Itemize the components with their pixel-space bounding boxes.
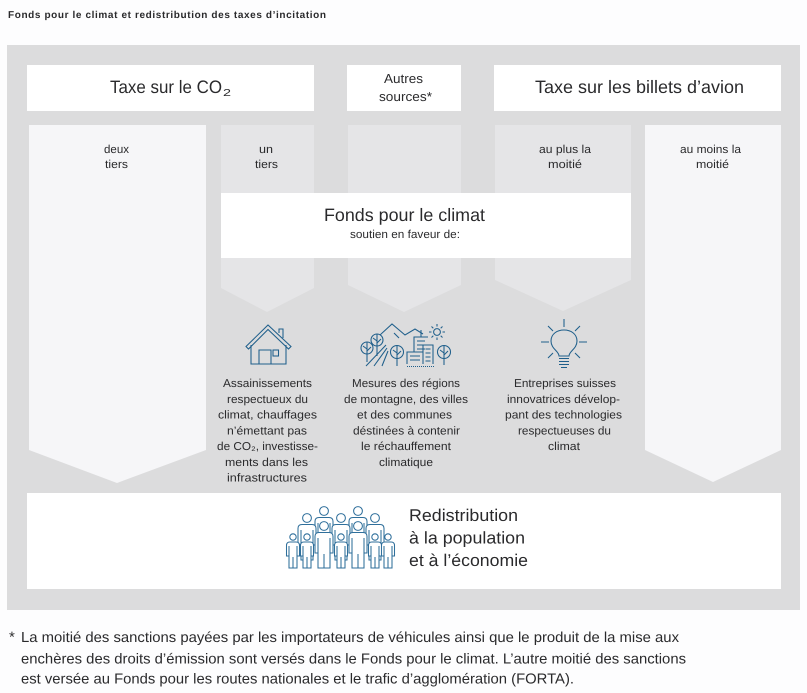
icon: group of people — [286, 507, 394, 568]
box: Autres sources: sources* — [379, 89, 432, 104]
box: Autres sources — [347, 65, 461, 111]
text: mesures des régions: climatique — [379, 457, 433, 469]
arrow: au moins la moitié: moitié — [696, 159, 729, 171]
box: Fonds pour le climat: Fonds pour le climat — [324, 205, 485, 225]
text: assainissements: de CO₂, investisse- — [217, 441, 318, 453]
arrow: deux tiers — [29, 125, 206, 483]
box: Taxe sur le CO2 — [27, 65, 314, 111]
arrow: au plus la moitié: moitié — [548, 159, 582, 171]
text: assainissements: infrastructures — [227, 472, 307, 484]
text: redistribution label: à la population — [409, 528, 525, 548]
icon: house — [246, 325, 291, 364]
text: mesures des régions — [344, 378, 468, 469]
box: Fonds pour le climat: soutien en faveur de: — [350, 229, 460, 241]
text: entreprises suisses: respectueuses du — [518, 426, 611, 438]
text: redistribution label — [409, 506, 528, 570]
icon: mountains, city and trees — [361, 324, 450, 366]
text: mesures des régions: de montagne, des villes — [344, 394, 468, 406]
footnote: est versée au Fonds pour les routes nationales et le trafic d’agglomération (FORTA). — [21, 672, 574, 688]
text: assainissements: respectueux du — [227, 394, 308, 406]
box: Taxe sur les billets d'avion: Taxe sur les billets d’avion — [535, 77, 744, 97]
footnote — [9, 629, 686, 688]
arrow: un tiers: un — [259, 144, 273, 156]
box: redistribution — [27, 493, 781, 589]
arrow: au moins la moitié — [645, 125, 781, 482]
box: Taxe sur le CO2: Taxe sur le CO — [110, 77, 222, 97]
arrow: un tiers: tiers — [255, 159, 278, 171]
text: entreprises suisses: Entreprises suisses — [514, 378, 616, 390]
text: assainissements: climat, chauffages — [218, 410, 317, 422]
text: mesures des régions: et des communes — [357, 410, 452, 422]
text: entreprises suisses: innovatrices dévelop- — [507, 394, 620, 406]
box: Taxe sur les billets d'avion — [494, 65, 781, 111]
arrow: deux tiers: tiers — [105, 159, 128, 171]
text: redistribution label: Redistribution — [409, 506, 518, 525]
title: Fonds pour le climat et redistribution des taxes d’incitation — [8, 10, 326, 21]
text: entreprises suisses: pant des technologies — [505, 410, 622, 422]
text: assainissements: ments dans les — [225, 457, 308, 469]
arrow: au moins la moitié: au moins la — [680, 144, 742, 156]
arrow: deux tiers: deux — [104, 144, 129, 156]
text: assainissements: n’émettant pas — [227, 426, 307, 438]
box: Autres sources: Autres — [384, 71, 424, 86]
footnote: La moitié des sanctions payées par les importateurs de véhicules ainsi que le produit de la mise aux — [21, 630, 680, 646]
text: assainissements: Assainissements — [223, 378, 312, 390]
text: entreprises suisses — [505, 378, 622, 453]
footnote: enchères des droits d’émission sont versés dans le Fonds pour le climat. L’autre moitié des sanctions — [21, 652, 686, 668]
text: mesures des régions: Mesures des régions — [352, 378, 460, 390]
icon: light bulb — [541, 319, 587, 368]
arrow: autres sources — [348, 125, 461, 312]
arrow: au plus la moitié: au plus la — [539, 144, 592, 156]
text: entreprises suisses: climat — [548, 441, 581, 453]
text: mesures des régions: le réchauffement — [361, 441, 452, 453]
box: Fonds pour le climat — [221, 193, 631, 258]
arrow: un tiers — [221, 125, 314, 312]
text: redistribution label: et à l’économie — [409, 551, 528, 570]
text: mesures des régions: déstinées à contenir — [353, 426, 460, 438]
text: assainissements — [217, 378, 318, 484]
arrow: au plus la moitié — [495, 125, 631, 311]
box: Taxe sur le CO2: 2 — [223, 88, 232, 99]
footnote: * — [9, 629, 15, 646]
